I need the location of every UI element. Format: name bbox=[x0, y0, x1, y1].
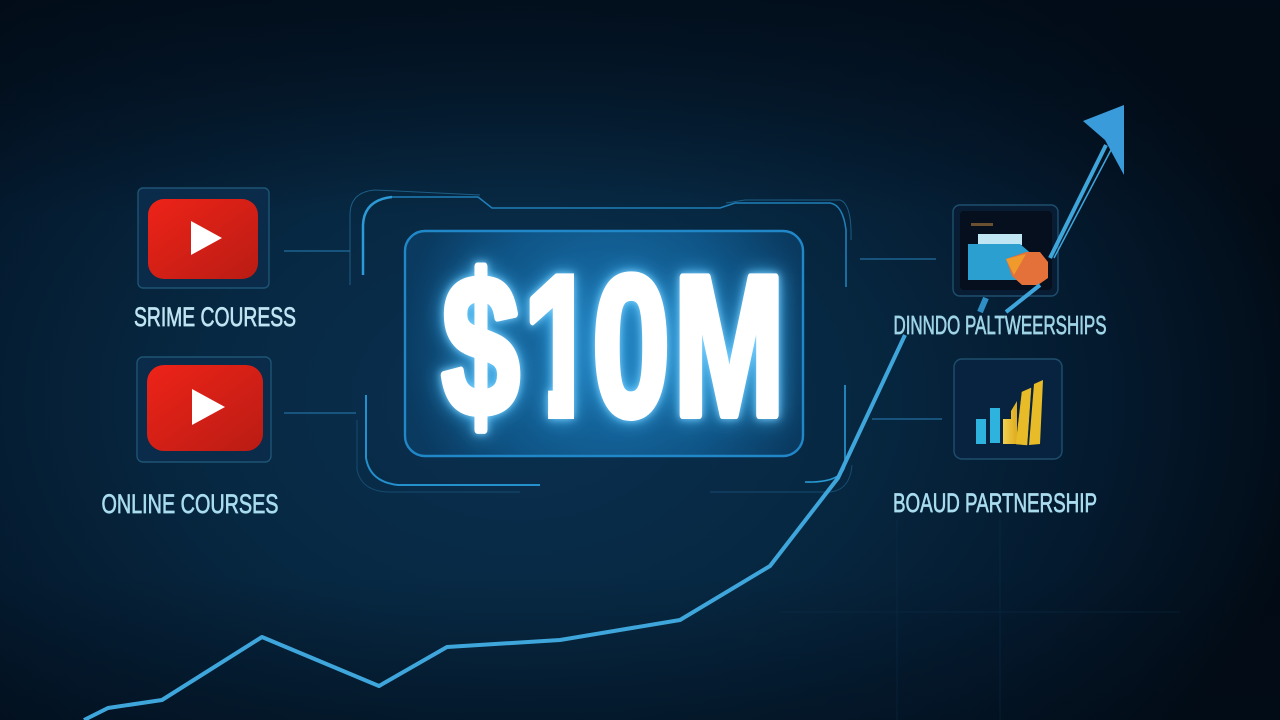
panel: right bottom item bbox=[893, 359, 1097, 518]
panel: left top item bbox=[134, 188, 296, 332]
outer frame lines bbox=[350, 190, 852, 492]
icon frame bbox=[137, 357, 271, 462]
icon: play button bbox=[147, 365, 263, 451]
label: SRIME COURESS bbox=[134, 302, 296, 332]
icon frame bbox=[138, 188, 269, 288]
$10M value bbox=[440, 262, 779, 434]
$10M glow inner bbox=[436, 257, 784, 440]
arrow head bbox=[1083, 105, 1124, 175]
$10M glow: 1 bbox=[523, 234, 601, 458]
icon: folder and shield bbox=[968, 223, 1048, 285]
icon frame bbox=[953, 205, 1058, 296]
panel: left bottom item bbox=[102, 357, 278, 519]
$10M glow inner: M bbox=[673, 235, 785, 458]
growth line chart bbox=[84, 298, 986, 720]
inner panel bbox=[405, 231, 803, 456]
label: ONLINE COURSES bbox=[102, 489, 278, 519]
$10M glow inner: $ bbox=[442, 234, 520, 458]
connector lines bbox=[284, 251, 942, 419]
icon: bar chart bbox=[976, 380, 1043, 445]
$10M glow: M bbox=[673, 235, 785, 458]
$10M value: 1 bbox=[523, 234, 601, 458]
label: DINNDO PALTWEERSHIPS bbox=[894, 310, 1106, 340]
arrow segment over icon bbox=[1006, 145, 1112, 312]
$10M glow: 0 bbox=[592, 234, 670, 458]
panel: central $10M frame bbox=[350, 190, 852, 492]
label: BOAUD PARTNERSHIP bbox=[893, 488, 1097, 518]
icon: play button bbox=[148, 199, 258, 279]
$10M value: $ bbox=[442, 234, 520, 458]
$10M glow bbox=[442, 234, 785, 458]
$10M glow: $ bbox=[442, 234, 520, 458]
$10M value: 0 bbox=[592, 234, 670, 458]
$10M glow inner: 1 bbox=[523, 234, 601, 458]
$10M glow inner: 0 bbox=[592, 234, 670, 458]
icon frame bbox=[954, 359, 1062, 459]
panel: right top item bbox=[894, 145, 1112, 340]
$10M value: M bbox=[673, 235, 785, 458]
